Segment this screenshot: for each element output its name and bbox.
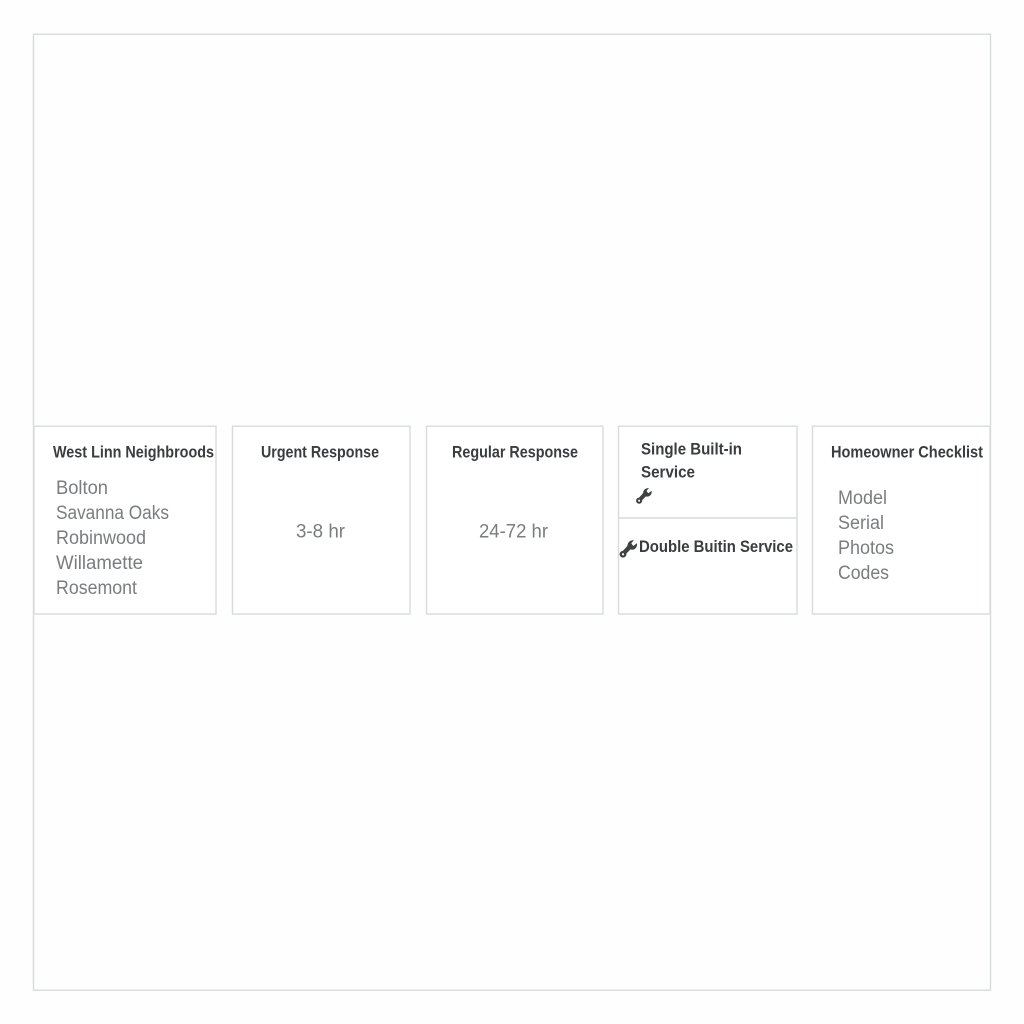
icon: wrench, single service [637, 488, 652, 503]
neighborhood list: Robinwood [56, 528, 146, 549]
value: 24-72 hr: 24-72 hr [479, 522, 549, 542]
heading: West Linn Neighbroods: West Linn Neighbroods [53, 444, 214, 462]
checklist items: Photos [838, 538, 894, 559]
checklist items [838, 488, 894, 584]
panel: regular response [426, 426, 603, 614]
icon: wrench, double service [621, 540, 637, 557]
panel: West Linn neighborhoods [34, 426, 216, 614]
panel: built-in service: Service [641, 464, 695, 482]
checklist items: Codes [838, 563, 889, 584]
panel: urgent response [232, 426, 410, 614]
panel: built-in service [618, 426, 797, 614]
heading: Single Built-in Service: Single Built-in [641, 440, 742, 458]
checklist items: Model [838, 488, 887, 509]
neighborhood list: Willamette [56, 553, 143, 574]
heading: Homeowner Checklist: Homeowner Checklist [831, 444, 983, 462]
neighborhood list: Bolton [56, 478, 108, 499]
neighborhood list [56, 478, 169, 599]
heading: Regular Response: Regular Response [452, 444, 578, 462]
heading: Double Buitin Service: Double Buitin Service [639, 538, 793, 556]
neighborhood list: Savanna Oaks [56, 503, 169, 524]
checklist items: Serial [838, 513, 884, 534]
value: 3-8 hr: 3-8 hr [296, 522, 346, 542]
neighborhood list: Rosemont [56, 578, 138, 599]
panel: homeowner checklist [812, 426, 990, 614]
heading: Urgent Response: Urgent Response [261, 444, 379, 462]
